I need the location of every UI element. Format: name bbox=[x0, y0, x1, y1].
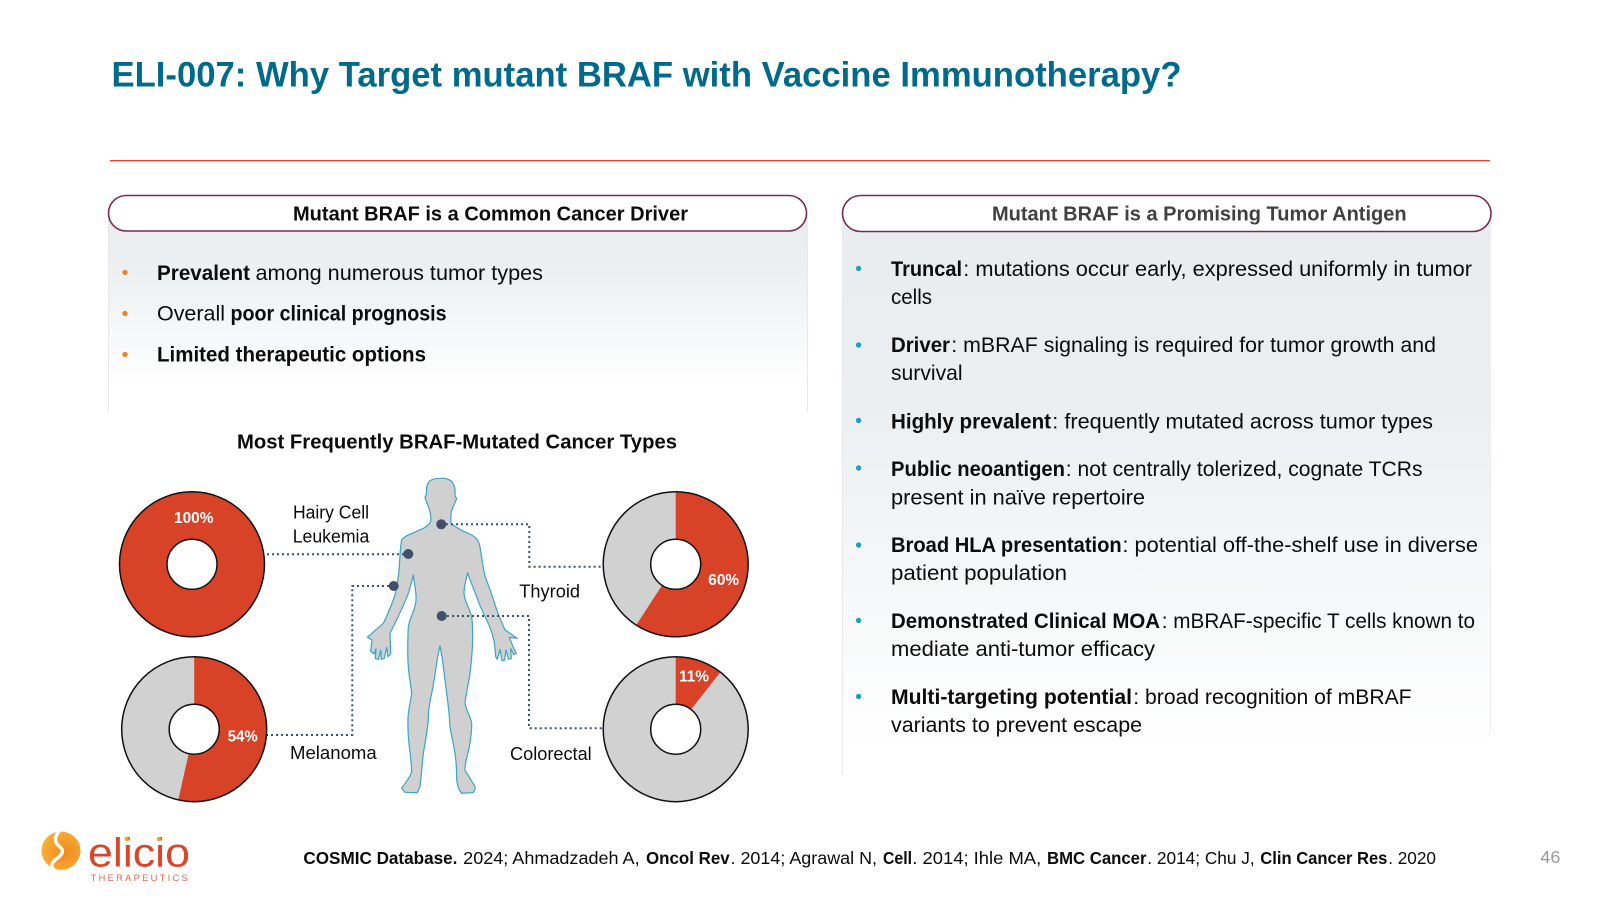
bullet: public neoantigen: : not centrally tolerized, cognate TCRs bbox=[1066, 458, 1422, 481]
label: thyroid: Thyroid bbox=[519, 582, 580, 602]
footnote: references: . 2014; Chu J, bbox=[1147, 848, 1255, 868]
bullet: multi-targeting potential bbox=[856, 686, 1412, 737]
footnote: references: Clin Cancer Res bbox=[1260, 848, 1388, 868]
page number: 46 bbox=[1540, 847, 1560, 867]
panel heading: right bbox=[842, 196, 1491, 232]
label: hairy cell leukemia bbox=[293, 502, 370, 547]
connector: hairy cell leukemia bbox=[267, 553, 408, 555]
bullet: demonstrated clinical MOA: : mBRAF-specific T cells known to bbox=[1162, 610, 1475, 633]
bullet: highly prevalent: Highly prevalent bbox=[891, 410, 1051, 434]
bullet: truncal: cells bbox=[891, 286, 932, 309]
title: ELI-007: Why Target mutant BRAF with Vaccine Immunotherapy? bbox=[112, 56, 1182, 94]
bullet list: left: among numerous tumor types bbox=[256, 262, 543, 285]
donut: thyroid 60% bbox=[603, 492, 748, 637]
bullet: broad HLA presentation: Broad HLA presentation bbox=[891, 534, 1122, 557]
footnote: references: 2024; Ahmadzadeh A, bbox=[463, 848, 640, 868]
panel heading: right: Mutant BRAF is a Promising Tumor Antigen bbox=[992, 204, 1407, 226]
bullet: public neoantigen: Public neoantigen bbox=[891, 458, 1065, 481]
bullet list: left: Prevalent bbox=[157, 262, 250, 285]
bullet: multi-targeting potential: : broad recognition of mBRAF bbox=[1133, 686, 1412, 709]
label: colorectal: Colorectal bbox=[510, 744, 592, 764]
footnote: references: . 2014; Agrawal N, bbox=[730, 848, 877, 868]
donut: melanoma 54% bbox=[122, 657, 267, 802]
bullet: broad HLA presentation bbox=[856, 534, 1478, 585]
bullet: truncal: Truncal bbox=[891, 258, 962, 281]
bullet: highly prevalent bbox=[856, 410, 1433, 434]
connector: thyroid bbox=[441, 524, 602, 567]
logo: elicio therapeutics bbox=[42, 830, 190, 883]
bullet: public neoantigen bbox=[856, 458, 1422, 510]
footnote: references bbox=[303, 848, 1436, 868]
bullet: truncal bbox=[856, 258, 1472, 309]
connector: colorectal bbox=[442, 616, 602, 728]
panel: mutant BRAF is a promising tumor antigen bbox=[842, 196, 1491, 775]
donut: colorectal 11% bbox=[603, 657, 748, 802]
label: hairy cell leukemia: Leukemia bbox=[293, 527, 370, 547]
donut: colorectal 11%: 11% bbox=[679, 669, 709, 686]
panel heading: left: Mutant BRAF is a Common Cancer Driver bbox=[293, 204, 688, 226]
footnote: references: Oncol Rev bbox=[646, 848, 730, 868]
bullet list: left: Overall bbox=[157, 303, 225, 326]
donut: thyroid 60%: 60% bbox=[708, 572, 739, 589]
bullet: multi-targeting potential: Multi-targeting potential bbox=[891, 686, 1132, 709]
bullet: multi-targeting potential: variants to prevent escape bbox=[891, 714, 1142, 737]
bullet: broad HLA presentation: patient population bbox=[891, 562, 1067, 585]
panel heading: left bbox=[108, 196, 806, 231]
bullet: demonstrated clinical MOA bbox=[856, 610, 1475, 661]
bullet list: left: Limited therapeutic options bbox=[157, 344, 426, 366]
donut: hairy cell leukemia 100%: 100% bbox=[174, 510, 214, 527]
logo: elicio therapeutics: THERAPEUTICS bbox=[91, 873, 188, 883]
bullet list: left: poor clinical prognosis bbox=[230, 303, 446, 326]
connector: melanoma bbox=[267, 586, 394, 735]
bullet: driver: : mBRAF signaling is required for tumor growth and bbox=[951, 334, 1436, 357]
bullet: driver: survival bbox=[891, 362, 963, 385]
icon: logo mark bbox=[42, 830, 80, 871]
label: melanoma: Melanoma bbox=[290, 743, 378, 763]
panel: mutant BRAF is a common cancer driver bbox=[108, 196, 808, 412]
bullet: public neoantigen: present in naïve repertoire bbox=[891, 486, 1145, 510]
bullet: demonstrated clinical MOA: Demonstrated Clinical MOA bbox=[891, 610, 1160, 633]
bullet list: left bbox=[122, 262, 543, 366]
bullet: highly prevalent: : frequently mutated across tumor types bbox=[1052, 410, 1433, 434]
footnote: references: Cell bbox=[883, 848, 912, 868]
bullet: driver: Driver bbox=[891, 334, 950, 357]
footnote: references: . 2014; Ihle MA, bbox=[912, 848, 1041, 868]
logo: elicio therapeutics: elicio bbox=[88, 830, 190, 876]
bullet: driver bbox=[856, 334, 1436, 385]
footnote: references: COSMIC Database. bbox=[303, 848, 457, 868]
body location dots bbox=[389, 519, 447, 621]
label: hairy cell leukemia: Hairy Cell bbox=[293, 502, 369, 522]
footnote: references: BMC Cancer bbox=[1047, 848, 1147, 868]
footnote: references: . 2020 bbox=[1388, 848, 1436, 868]
icon: human body figure bbox=[367, 478, 517, 793]
bullet: broad HLA presentation: : potential off-the-shelf use in diverse bbox=[1122, 534, 1478, 557]
bullet: demonstrated clinical MOA: mediate anti-tumor efficacy bbox=[891, 638, 1156, 661]
donut: melanoma 54%: 54% bbox=[228, 729, 258, 746]
donut: hairy cell leukemia 100% bbox=[120, 492, 264, 637]
chart heading: Most Frequently BRAF-Mutated Cancer Types bbox=[237, 432, 677, 454]
bullet: truncal: : mutations occur early, expressed uniformly in tumor bbox=[963, 258, 1472, 281]
